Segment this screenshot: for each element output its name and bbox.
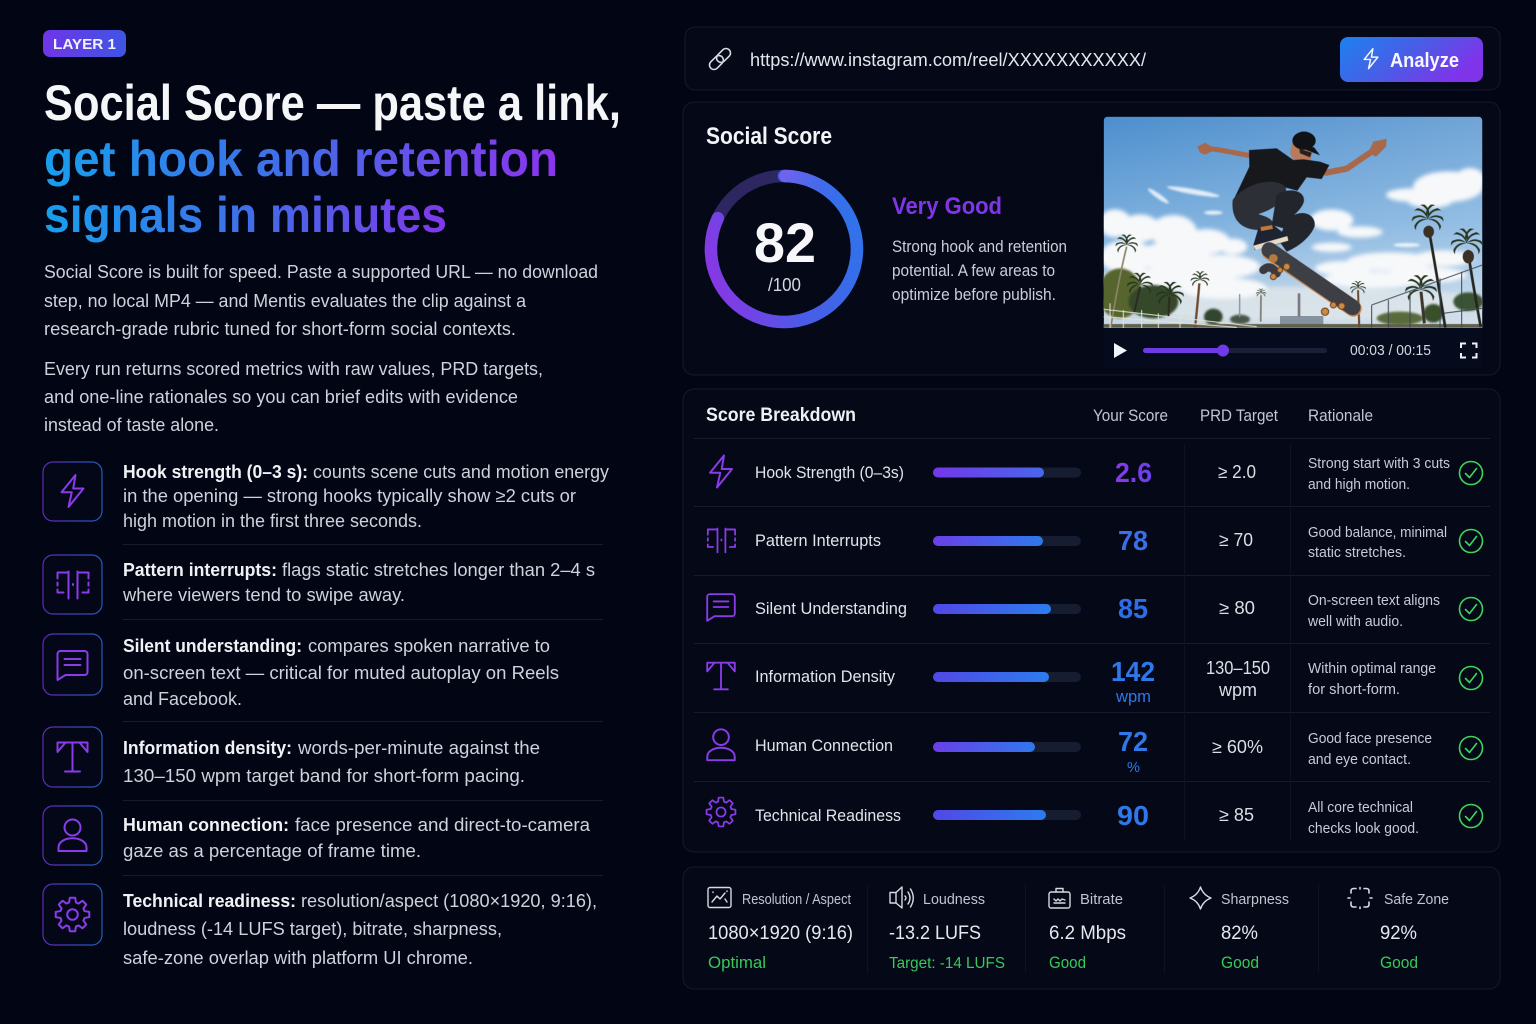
rating: very good: Strong hook and retention [892, 238, 1067, 256]
rating: very good: potential. A few areas to [892, 262, 1055, 280]
row: human connection: and eye contact. [1308, 752, 1411, 768]
metric: resolution / aspect: Resolution / Aspect [742, 892, 851, 908]
row: human connection: 72 [1118, 726, 1148, 757]
url text: https://www.instagram.com/reel/XXXXXXXXXXX/ [750, 49, 1147, 70]
row: pattern interrupts [708, 525, 1482, 561]
row: silent understanding: Silent Understanding [755, 600, 907, 618]
table header: Rationale [1308, 407, 1373, 425]
row: hook strength: Hook Strength (0–3s) [755, 464, 904, 482]
panel: technical metrics [683, 867, 1500, 989]
feature: information density: words-per-minute against the [297, 737, 540, 758]
row: technical readiness: checks look good. [1308, 821, 1419, 837]
rating: very good: Very Good [892, 193, 1002, 220]
intro paragraph 2: instead of taste alone. [44, 414, 219, 435]
row: hook strength: ≥ 2.0 [1218, 462, 1256, 482]
row: hook strength: 2.6 [1115, 457, 1152, 488]
row: information density: wpm [1218, 680, 1257, 700]
title [44, 75, 621, 243]
feature: silent understanding [43, 634, 559, 709]
intro paragraph 2: Every run returns scored metrics with raw values, PRD targets, [44, 358, 543, 379]
row: silent understanding: ≥ 80 [1219, 598, 1255, 618]
metric: sharpness: Sharpness [1221, 892, 1289, 908]
metric: sharpness: 82% [1221, 922, 1258, 944]
button: analyze [1340, 37, 1483, 82]
table header: Your Score [1093, 407, 1168, 425]
metric: loudness [889, 887, 1005, 972]
row: information density [707, 656, 1482, 706]
row: information density: for short-form. [1308, 682, 1400, 698]
metric: safe zone: 92% [1380, 922, 1417, 944]
fences [1372, 265, 1482, 328]
row: silent understanding [707, 593, 1482, 630]
metric: bitrate: Good [1049, 953, 1086, 972]
row: technical readiness: 90 [1117, 800, 1149, 831]
icon: play [1114, 343, 1127, 358]
title: Social Score — paste a link, [44, 75, 621, 131]
table header: Score Breakdown [706, 404, 856, 426]
metric: resolution / aspect: 1080×1920 (9:16) [708, 922, 853, 944]
table header [706, 404, 1373, 426]
title: get hook and retention [44, 131, 558, 187]
video frame: skateboarder [1097, 117, 1497, 328]
feature: technical readiness: Technical readiness: [123, 890, 296, 911]
intro paragraph 2 [44, 358, 543, 435]
badge: layer 1 [43, 30, 126, 57]
rating: very good [892, 193, 1067, 304]
heading: social score: Social Score [706, 123, 832, 150]
skateboard [1270, 252, 1353, 308]
row: information density: wpm [1115, 688, 1151, 706]
feature: hook strength: high motion in the first three seconds. [123, 510, 422, 531]
row: information density: 142 [1111, 656, 1155, 687]
progress bar [1143, 344, 1327, 356]
feature list [43, 461, 610, 968]
row: pattern interrupts: Pattern Interrupts [755, 532, 881, 550]
feature: silent understanding: compares spoken narrative to [308, 635, 550, 656]
row: information density: Within optimal range [1308, 661, 1436, 677]
feature: hook strength: counts scene cuts and motion energy [313, 461, 610, 482]
panel: url bar [685, 27, 1500, 90]
rating: very good: optimize before publish. [892, 286, 1056, 304]
metric: safe zone: Safe Zone [1384, 892, 1449, 908]
feature: human connection: Human connection: [123, 814, 289, 835]
feature: hook strength [43, 461, 610, 531]
skater [1197, 132, 1387, 315]
row: pattern interrupts: 78 [1118, 525, 1148, 556]
metric: sharpness: Good [1221, 953, 1259, 972]
row: hook strength: and high motion. [1308, 477, 1410, 493]
intro paragraph 2: and one-line rationales so you can brief edits with evidence [44, 386, 518, 407]
feature: silent understanding: Silent understanding: [123, 635, 302, 656]
intro paragraph 1: Social Score is built for speed. Paste a supported URL — no download [44, 261, 598, 282]
intro paragraph 1: research-grade rubric tuned for short-form social contexts. [44, 318, 516, 339]
score ring gauge: 82 [754, 211, 816, 274]
feature: pattern interrupts: flags static stretches longer than 2–4 s [282, 559, 595, 580]
panel: score breakdown [683, 389, 1500, 852]
video controls [1104, 328, 1482, 368]
row: silent understanding: On-screen text aligns [1308, 593, 1440, 609]
feature: human connection: gaze as a percentage of frame time. [123, 840, 421, 861]
row: pattern interrupts: static stretches. [1308, 545, 1406, 561]
row: pattern interrupts: Good balance, minimal [1308, 525, 1447, 541]
metric: safe zone [1348, 888, 1449, 972]
row: human connection: Good face presence [1308, 731, 1432, 747]
feature: technical readiness [43, 884, 597, 968]
feature: pattern interrupts: Pattern interrupts: [123, 559, 277, 580]
time code: 00:03 / 00:15 [1350, 343, 1431, 359]
row: silent understanding: 85 [1118, 593, 1148, 624]
row: information density: 130–150 [1206, 658, 1270, 678]
row: silent understanding: well with audio. [1307, 614, 1403, 630]
palms [1111, 227, 1481, 328]
metric: bitrate: Bitrate [1080, 892, 1123, 908]
feature: pattern interrupts: where viewers tend to swipe away. [122, 584, 405, 605]
metric: sharpness [1190, 887, 1289, 972]
score ring gauge [711, 176, 857, 322]
feature: pattern interrupts [43, 555, 595, 614]
badge: layer 1: LAYER 1 [53, 36, 116, 53]
score ring gauge: /100 [768, 275, 801, 295]
metric: resolution / aspect [708, 888, 853, 972]
metric: bitrate [1049, 888, 1126, 972]
metric: bitrate: 6.2 Mbps [1049, 922, 1126, 944]
video player [1097, 117, 1497, 368]
feature: technical readiness: loudness (-14 LUFS target), bitrate, sharpness, [123, 918, 502, 939]
background trees [1098, 268, 1483, 325]
feature: technical readiness: safe-zone overlap with platform UI chrome. [123, 947, 473, 968]
table header: PRD Target [1200, 407, 1278, 425]
panel: social score [683, 102, 1500, 375]
metric: safe zone: Good [1380, 953, 1418, 972]
row: information density: Information Density [755, 668, 896, 686]
row: technical readiness [707, 798, 1482, 837]
row: human connection: Human Connection [755, 737, 893, 755]
row: technical readiness: ≥ 85 [1219, 805, 1254, 825]
feature: silent understanding: on-screen text — critical for muted autoplay on Reels [123, 662, 559, 683]
feature: information density: 130–150 wpm target band for short-form pacing. [123, 765, 525, 786]
row: hook strength [710, 456, 1482, 493]
row: technical readiness: All core technical [1308, 800, 1413, 816]
button: analyze: Analyze [1390, 50, 1459, 72]
row: pattern interrupts: ≥ 70 [1219, 530, 1253, 550]
feature: human connection [43, 806, 591, 865]
metric: loudness: Loudness [923, 892, 985, 908]
icon: fullscreen [1461, 344, 1476, 358]
row: technical readiness: Technical Readiness [755, 807, 901, 825]
feature: hook strength: in the opening — strong hooks typically show ≥2 cuts or [123, 485, 576, 506]
row: human connection: ≥ 60% [1212, 737, 1263, 757]
feature: hook strength: Hook strength (0–3 s): [123, 461, 308, 482]
feature: information density: Information density: [123, 737, 292, 758]
intro paragraph 1 [44, 261, 598, 339]
intro paragraph 1: step, no local MP4 — and Mentis evaluates the clip against a [44, 290, 527, 311]
lower pale haze [1097, 287, 1497, 320]
icon: link [708, 47, 732, 71]
metric: loudness: Target: -14 LUFS [889, 955, 1005, 972]
row: human connection: % [1127, 759, 1140, 776]
feature: silent understanding: and Facebook. [123, 688, 242, 709]
feature: human connection: face presence and direct-to-camera [295, 814, 591, 835]
metric: resolution / aspect: Optimal [708, 953, 766, 972]
title: signals in minutes [44, 187, 447, 243]
row: human connection [707, 726, 1482, 776]
feature: technical readiness: resolution/aspect (1080×1920, 9:16), [301, 890, 597, 911]
metric: loudness: -13.2 LUFS [889, 922, 981, 944]
row: hook strength: Strong start with 3 cuts [1308, 456, 1450, 472]
feature: information density [43, 727, 540, 787]
